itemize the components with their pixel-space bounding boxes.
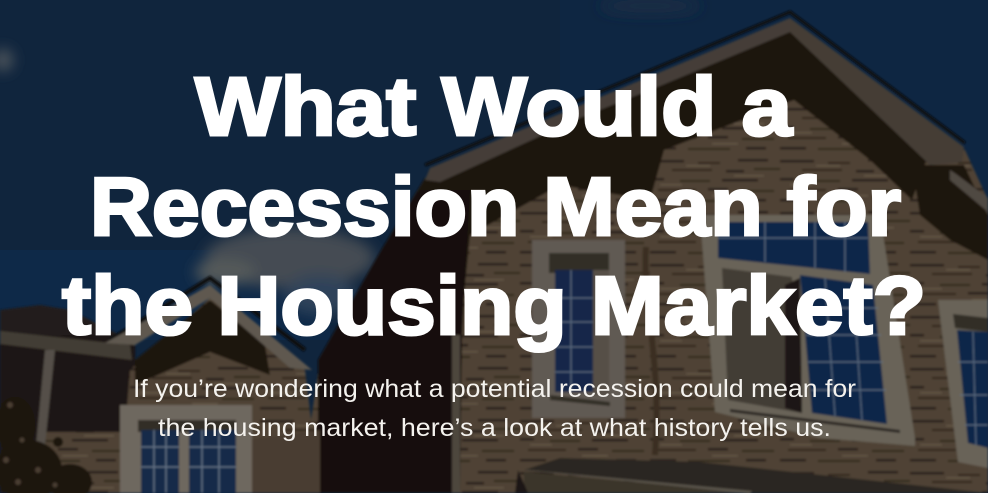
downspout: [36, 350, 55, 445]
small gable trim: [105, 285, 312, 370]
main roof fascia left: [425, 18, 790, 182]
bottom left tree: [0, 397, 92, 493]
lower right roof trim: [950, 170, 988, 212]
main gable wall: [300, 25, 988, 493]
central large window: [700, 215, 915, 446]
left gutter: [0, 331, 132, 360]
central dark tower: [300, 190, 470, 493]
bottom left window: [120, 405, 252, 493]
shadow under main eave: [318, 30, 930, 493]
central small window: [532, 240, 625, 418]
vertical trim post: [452, 335, 460, 493]
small gable brick: [120, 298, 320, 493]
main roof fascia right: [790, 18, 964, 165]
title line 2: Recession Mean for: [90, 160, 901, 253]
title: [62, 60, 926, 352]
lower porch roof: [515, 458, 988, 493]
left house dark roof: [0, 305, 130, 350]
subtitle line 1: If you’re wondering what a potential recession could mean for: [133, 375, 856, 403]
right window: [938, 300, 988, 468]
left house lower brick: [45, 432, 135, 493]
subtitle: [133, 375, 856, 442]
small gable dark roof edge: [110, 278, 305, 350]
subtitle line 2: the housing market, here’s a look at what history tells us.: [158, 414, 831, 442]
title line 3: the Housing Market?: [62, 259, 926, 352]
lower right of gable brick shadow: [250, 430, 320, 493]
upper right wall shadow: [912, 165, 988, 260]
title line 1: What Would a: [195, 60, 793, 153]
vine on wall: [645, 247, 656, 455]
small gable shadow: [135, 300, 270, 385]
clouds: [0, 0, 700, 315]
main roof dark edge: [425, 12, 965, 165]
left house dark wall: [0, 335, 135, 493]
